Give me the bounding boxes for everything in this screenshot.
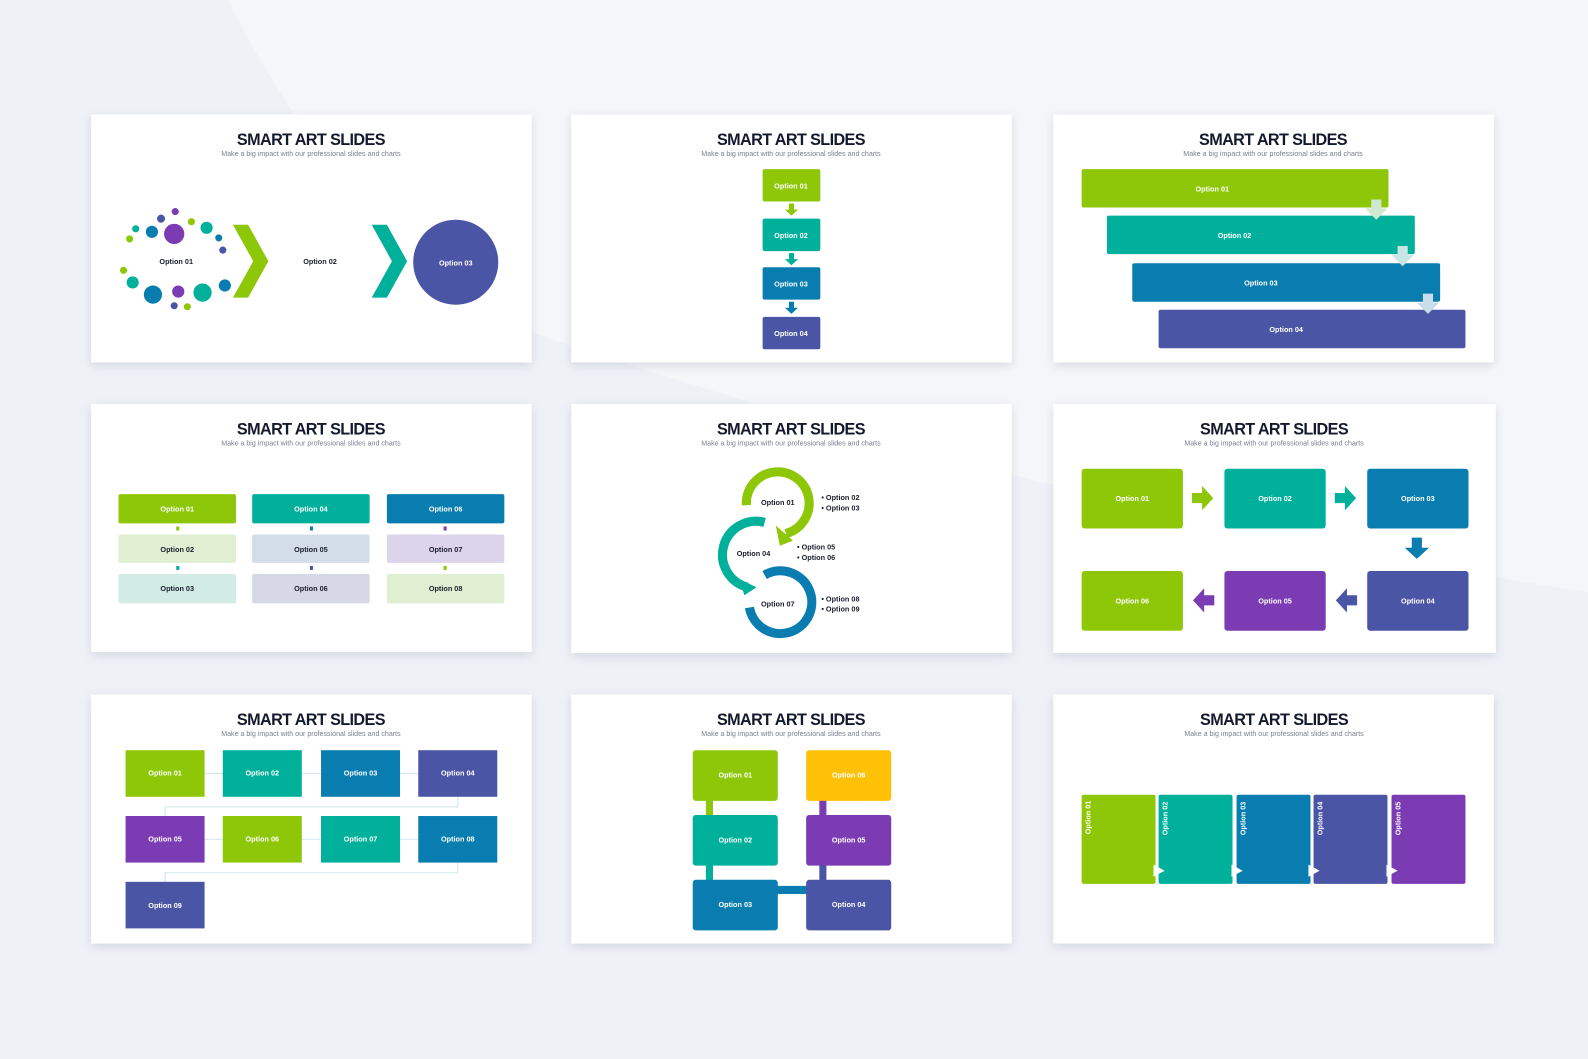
panel 5: circular arrows: Option 07 [761, 599, 795, 608]
panel 9: horizontal cards [1053, 695, 1494, 944]
panel 8: U flow: Option 02 [718, 835, 752, 844]
panel 9: horizontal cards: Option 01 [1084, 801, 1093, 834]
panel 6: snake flow: Option 02 [1258, 494, 1292, 503]
panel 7: grid flow: Option 03 [344, 769, 377, 778]
panel 5: circular arrows: Option 01 [761, 498, 795, 507]
panel 4: three column lists: Option 01 [160, 504, 194, 513]
panel 6: snake flow: Option 04 [1401, 596, 1436, 605]
label option 01: Option 01 [159, 257, 193, 266]
panel 3: staggered bars: Option 04 [1269, 325, 1304, 334]
panel 5: circular arrows: • Option 08 [821, 594, 860, 603]
panel 8: U flow: SMART ART SLIDES [717, 711, 866, 729]
panel 2: vertical flow: Option 02 [774, 231, 808, 240]
panel 4: three column lists: Option 06 [429, 504, 462, 513]
panel 5: circular arrows: • Option 03 [821, 503, 860, 512]
panel 2: vertical flow: Option 04 [774, 329, 809, 338]
panel 6: snake flow: Option 01 [1115, 494, 1149, 503]
panel 4: three column lists: Option 02 [160, 545, 194, 554]
chevron green [233, 225, 268, 298]
panel 7: grid flow: Option 09 [148, 901, 182, 910]
panel 7: grid flow: Make a big impact with our professional slides and charts [221, 730, 401, 738]
panel 5: circular arrows: • Option 05 [797, 543, 835, 552]
panel 4: three column lists [91, 404, 532, 652]
panel 8: U flow: Option 05 [832, 835, 865, 844]
panel 2: vertical flow: Option 01 [774, 181, 808, 190]
panel 3: staggered bars: SMART ART SLIDES [1199, 131, 1348, 149]
panel 7: grid flow: Option 08 [441, 834, 475, 843]
panel 2: vertical flow: Make a big impact with our professional slides and charts [701, 150, 881, 158]
panel 4: three column lists: Option 08 [429, 584, 462, 593]
panel 3: staggered bars: Option 03 [1244, 279, 1278, 288]
panel 5: circular arrows: Option 04 [737, 549, 771, 558]
panel 5: circular arrows: SMART ART SLIDES [717, 420, 866, 438]
panel 5: circular arrows: • Option 06 [797, 553, 835, 562]
panel 8: U flow [571, 695, 1012, 944]
title: SMART ART SLIDES [237, 131, 386, 149]
panel 5: circular arrows: • Option 09 [821, 605, 860, 614]
panel 2: vertical flow: Option 03 [774, 280, 808, 289]
panel 9: horizontal cards: Option 05 [1394, 802, 1403, 835]
panel 8: U flow: Make a big impact with our professional slides and charts [701, 730, 881, 738]
panel 3: staggered bars: Make a big impact with our professional slides and charts [1183, 150, 1363, 158]
panel 9: horizontal cards: SMART ART SLIDES [1200, 711, 1349, 729]
panel 2: vertical flow [571, 114, 1012, 362]
panel 3: staggered bars: Option 02 [1218, 231, 1251, 240]
panel 7: grid flow: Option 02 [246, 769, 279, 778]
panel 6: snake flow: Make a big impact with our professional slides and charts [1184, 439, 1364, 447]
panel 4: three column lists: Option 05 [294, 545, 328, 554]
panel 8: U flow: Option 06 [832, 771, 865, 780]
panel 2: vertical flow: SMART ART SLIDES [717, 131, 866, 149]
circle option 03 [413, 220, 498, 305]
panel 7: grid flow: Option 06 [246, 834, 279, 843]
panel 7: grid flow: Option 05 [148, 834, 182, 843]
dot ring [120, 208, 231, 310]
panel 5: circular arrows [571, 404, 1012, 653]
panel 4: three column lists: Option 04 [294, 504, 329, 513]
chevron teal [372, 225, 407, 298]
arrow rings [722, 472, 812, 634]
subtitle: Make a big impact with our professional slides and charts [221, 150, 401, 158]
panel 8: U flow: Option 01 [718, 771, 752, 780]
panel 9: horizontal cards: Option 04 [1316, 801, 1325, 835]
panel 7: grid flow [91, 695, 532, 944]
panel 5: circular arrows: • Option 02 [821, 493, 860, 502]
panel 4: three column lists: Option 07 [429, 545, 462, 554]
label option 02: Option 02 [303, 257, 337, 266]
panel 7: grid flow: Option 01 [148, 769, 182, 778]
panel 8: U flow: Option 04 [832, 900, 866, 909]
panel 1: dots and chevrons [91, 114, 532, 362]
panel 7: grid flow: Option 07 [344, 834, 377, 843]
panel 4: three column lists: Option 06 [294, 584, 328, 593]
panel 7: grid flow: SMART ART SLIDES [237, 711, 386, 729]
panel 6: snake flow [1053, 404, 1496, 653]
panel 9: horizontal cards: Make a big impact with our professional slides and charts [1184, 730, 1364, 738]
panel 4: three column lists: Make a big impact with our professional slides and charts [221, 439, 401, 447]
panel 9: horizontal cards: Option 03 [1239, 802, 1248, 835]
panel 9: horizontal cards: Option 02 [1161, 802, 1170, 835]
panel 4: three column lists: Option 03 [160, 584, 194, 593]
panel 3: staggered bars: Option 01 [1195, 184, 1229, 193]
panel 7: grid flow: Option 04 [441, 769, 476, 778]
panel 8: U flow: Option 03 [718, 900, 752, 909]
panel 1: dots and chevrons: Option 03 [439, 258, 473, 267]
panel 4: three column lists: SMART ART SLIDES [237, 420, 386, 438]
panel 6: snake flow: Option 03 [1401, 494, 1435, 503]
panel 5: circular arrows: Make a big impact with our professional slides and charts [701, 439, 881, 447]
panel 6: snake flow: Option 05 [1258, 596, 1292, 605]
panel 6: snake flow: SMART ART SLIDES [1200, 420, 1349, 438]
panel 3: staggered bars [1053, 114, 1494, 362]
panel 6: snake flow: Option 06 [1115, 596, 1149, 605]
